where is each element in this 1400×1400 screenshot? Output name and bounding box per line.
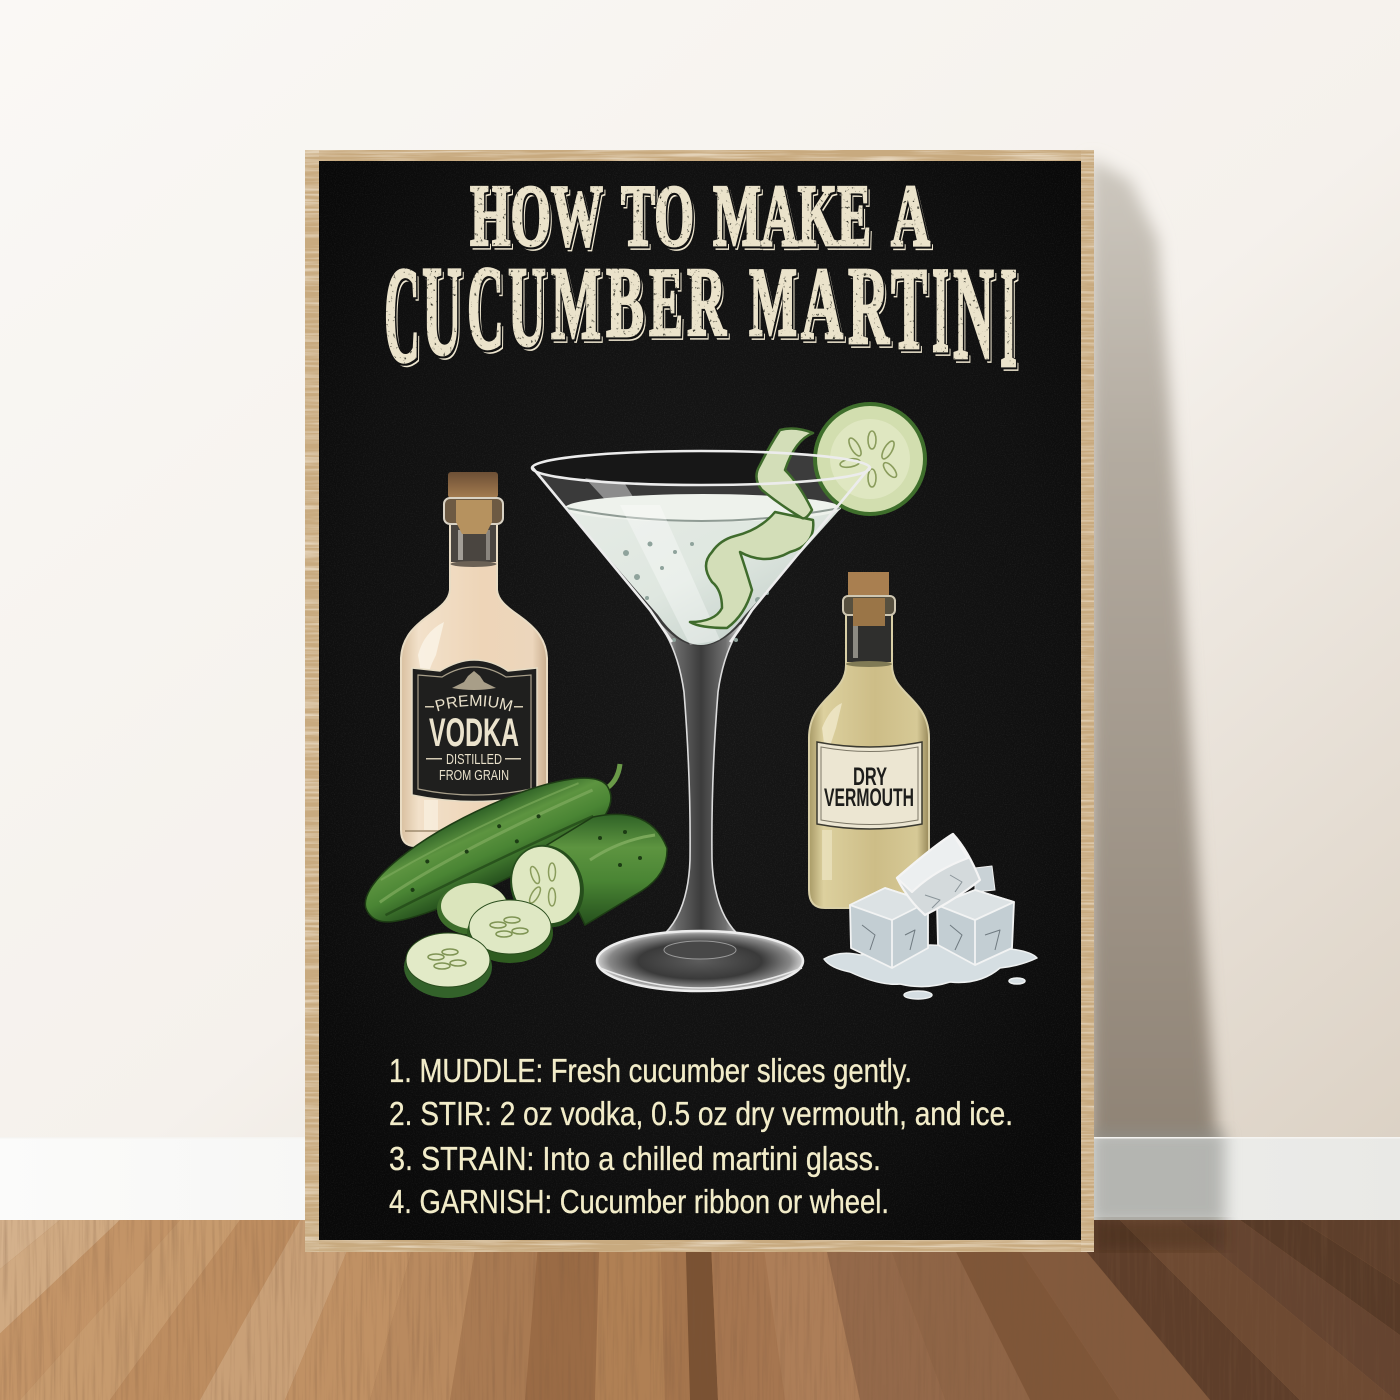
left cube — [850, 888, 928, 968]
right cube — [937, 890, 1014, 965]
cucumbers group — [348, 758, 667, 998]
instructions — [389, 1052, 1013, 1220]
bottle body — [401, 524, 547, 846]
cucumber wheel garnish — [813, 402, 927, 516]
title line 1: HOW — [470, 168, 602, 265]
top cube — [897, 834, 980, 915]
title line 2: I — [932, 241, 949, 378]
glass stem — [660, 625, 742, 938]
title line 2: R — [848, 245, 890, 368]
cork stopper — [444, 472, 503, 534]
title line 1: TO — [621, 168, 694, 265]
vermouth label — [817, 742, 922, 829]
step 1: 1. MUDDLE: Fresh cucumber slices gently. — [389, 1052, 912, 1089]
title line 2: M — [749, 248, 797, 357]
cork stopper — [843, 572, 895, 626]
title line 2: T — [891, 243, 927, 374]
title line 2: C — [384, 238, 420, 391]
wood floor — [0, 1220, 1400, 1400]
vermouth text: VERMOUTH — [824, 784, 914, 812]
glass foot — [597, 931, 803, 991]
liquid — [564, 494, 842, 645]
title line 1: MAKE — [713, 168, 871, 265]
ice cubes and puddle — [824, 834, 1037, 999]
title line 2: R — [687, 248, 727, 357]
title line 1: A — [891, 168, 930, 265]
distilled text: DISTILLED — [446, 751, 502, 768]
title line 2: M — [551, 246, 601, 361]
title line 2: A — [801, 247, 843, 361]
step 2: 2. STIR: 2 oz vodka, 0.5 oz dry vermouth, and ice. — [389, 1095, 1013, 1132]
title line 2: U — [508, 243, 546, 370]
frame shadow on wall — [1090, 158, 1218, 1150]
back cube — [975, 866, 995, 892]
title line 2: C — [467, 241, 504, 374]
cucumber cut — [498, 814, 667, 938]
vodka bottle — [400, 472, 548, 847]
title line 2: E — [649, 248, 683, 357]
chalkboard panel — [319, 161, 1081, 1240]
martini glass — [532, 402, 927, 991]
title line 2: B — [606, 246, 644, 358]
title — [384, 168, 1017, 398]
cucumber slice back — [437, 883, 509, 935]
baseboard — [0, 1130, 1400, 1225]
melt puddle — [824, 945, 1037, 999]
cucumber slice front — [467, 900, 553, 963]
cucumber whole — [348, 758, 625, 936]
glass rim — [532, 451, 870, 642]
from grain text: FROM GRAIN — [439, 767, 509, 784]
vermouth bottle — [809, 572, 929, 908]
title line 2: U — [422, 240, 462, 382]
bottle body — [809, 612, 929, 908]
premium text: PREMIUM — [435, 694, 513, 712]
poster frame — [305, 150, 1094, 1252]
text: I — [1000, 238, 1017, 398]
step 3: 3. STRAIN: Into a chilled martini glass. — [389, 1140, 881, 1177]
cucumber ribbon in glass — [690, 429, 813, 628]
vodka text: VODKA — [429, 711, 519, 755]
dry text: DRY — [853, 763, 887, 791]
cucumber slice bottom — [404, 933, 492, 998]
step 4: 4. GARNISH: Cucumber ribbon or wheel. — [389, 1183, 889, 1220]
title line 2: N — [953, 239, 994, 387]
glass bowl — [532, 452, 870, 646]
vodka label — [412, 660, 538, 802]
